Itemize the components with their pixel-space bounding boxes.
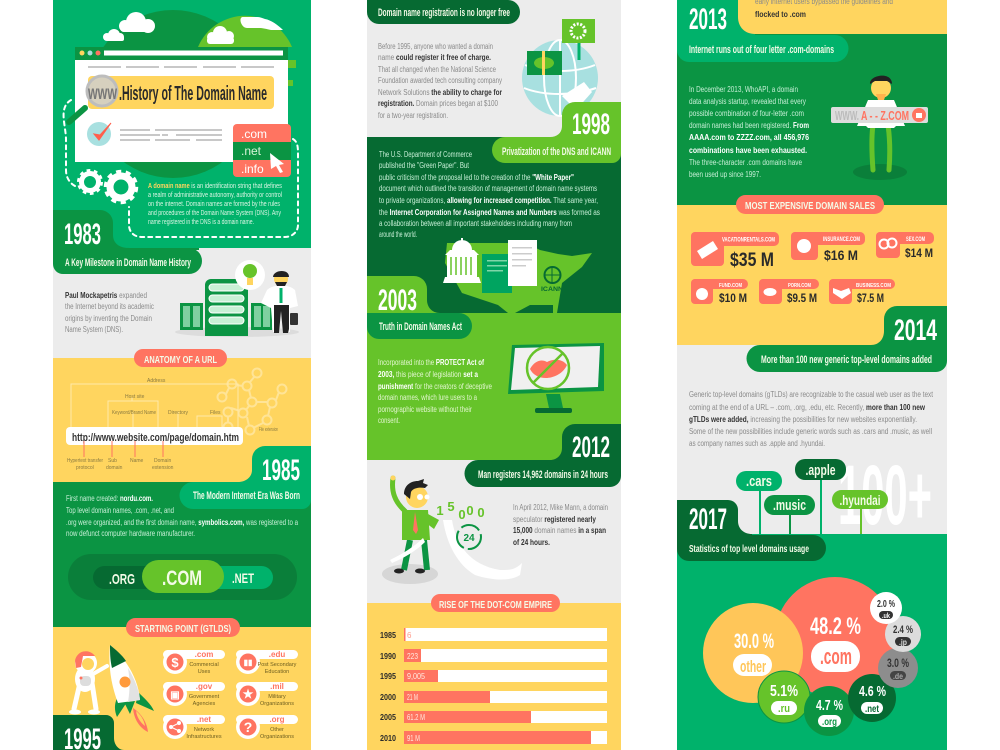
URL box bbox=[66, 427, 243, 457]
bubble: .ru bbox=[758, 671, 810, 723]
bubble: .uk bbox=[870, 592, 902, 624]
panel: 1985 milestone bbox=[53, 446, 311, 627]
domain extension menu: .com bbox=[241, 127, 267, 141]
pill heading bbox=[736, 195, 884, 214]
illustration: US map with capitol and documents bbox=[443, 238, 592, 313]
domain tags bbox=[736, 459, 888, 534]
sale: porn.com bbox=[759, 279, 819, 305]
milestone text: Top level domain names, .com, .net, and bbox=[66, 506, 174, 515]
column 2 bbox=[367, 0, 621, 750]
body text: Generic top-level domains (gTLDs) are recognizable to the casual web user as the text bbox=[689, 390, 934, 399]
bar chart bbox=[380, 628, 607, 744]
gTLD list: Other bbox=[270, 727, 284, 733]
bar chart: 1990 bbox=[380, 651, 396, 661]
gTLD list: Uses bbox=[198, 669, 211, 675]
bubble: .de bbox=[878, 648, 918, 688]
body text bbox=[689, 85, 809, 179]
URL labels: Keyword/Brand Name bbox=[112, 410, 156, 416]
illustration: man holding banner bbox=[831, 76, 928, 180]
URL labels: Sub bbox=[108, 458, 117, 464]
bar chart: 223 bbox=[407, 652, 418, 661]
sale: sex.com: SEX.COM bbox=[906, 237, 925, 243]
body text: In December 2013, WhoAPI, a domain bbox=[689, 85, 798, 94]
milestone text: Paul Mockapetris expanded bbox=[65, 291, 147, 300]
domain extension menu bbox=[233, 124, 291, 177]
panel: registration no longer free bbox=[367, 0, 621, 137]
body text: 2003, this piece of legislation set a bbox=[378, 370, 478, 379]
sale: business.com: BUSINESS.COM bbox=[856, 283, 891, 289]
panel: rise of the dot-com empire bbox=[367, 594, 621, 750]
body text: public criticism of the proposal led to the creation of the "White Paper" bbox=[379, 173, 574, 182]
body text: name could register it free of charge. bbox=[378, 53, 491, 62]
body text: 15,000 domain names in a span bbox=[513, 526, 606, 535]
body text: as company names such as .apple and .hyundai. bbox=[689, 439, 825, 448]
bubble: other bbox=[703, 603, 803, 703]
title: .History of The Domain Name bbox=[119, 83, 267, 105]
gTLD list: Military bbox=[268, 694, 286, 700]
body text: for a two-year registration. bbox=[378, 111, 448, 120]
body text: punishment for the creators of deceptive bbox=[378, 382, 492, 391]
panel: 2012 milestone bbox=[367, 424, 621, 603]
body text: Incorporated into the PROTECT Act of bbox=[378, 358, 484, 367]
gTLD list: Government bbox=[189, 694, 220, 700]
gTLD list: Education bbox=[265, 669, 289, 675]
graphic: TLD selector: .ORG bbox=[109, 571, 135, 588]
heading: Internet runs out of four letter .com-domains bbox=[689, 44, 834, 56]
body text: domain names, which lure users to a bbox=[378, 393, 477, 402]
bubble: .com bbox=[775, 577, 895, 697]
body text bbox=[513, 503, 608, 547]
sale: vacationrentals.com bbox=[691, 232, 779, 271]
URL labels: Domain bbox=[154, 458, 171, 464]
URL labels: Directory bbox=[168, 410, 189, 416]
body text bbox=[378, 42, 502, 120]
illustration: man with paper list bbox=[382, 476, 522, 584]
body text: been used up since 1997. bbox=[689, 170, 761, 179]
body text: coming at the end of a URL – .com, .org, .edu, etc. Recently, more than 100 new bbox=[689, 403, 926, 412]
URL labels: File extension bbox=[259, 427, 278, 433]
bubble: .de: 3.0 % bbox=[887, 656, 909, 670]
sale: sex.com bbox=[876, 232, 934, 260]
sale: insurance.com bbox=[791, 232, 865, 263]
body text: published the "Green Paper". But bbox=[379, 161, 470, 170]
definition text: and procedures of the Domain Name System (DNS). Any bbox=[148, 210, 281, 217]
gTLD list: ▮▮ bbox=[244, 658, 252, 667]
body text: the Internet Corporation for Assigned Names and Numbers was formed as bbox=[379, 208, 600, 217]
panel: 2017 statistics bbox=[677, 500, 947, 750]
bubble: .jp: .jp bbox=[899, 638, 907, 647]
body text: Foundation awarded tech consulting company bbox=[378, 76, 502, 85]
gTLD list: .edu bbox=[269, 650, 285, 659]
panel: 2014 milestone bbox=[677, 306, 947, 542]
sale: fund.com: $10 M bbox=[719, 291, 747, 305]
icon: magnifying glass bbox=[69, 76, 117, 122]
gTLD list: Infrastructures bbox=[186, 734, 222, 740]
gTLD list: $ bbox=[171, 655, 179, 670]
gTLD list: ★ bbox=[243, 687, 254, 701]
body text: registration. Domain prices began at $100 bbox=[378, 99, 498, 108]
bubble: .com: 48.2 % bbox=[810, 613, 861, 640]
bubble: .net: .net bbox=[865, 704, 880, 715]
illustration: man with paper list: 1 bbox=[436, 503, 444, 518]
illustration: man with paper list: 5 bbox=[447, 499, 455, 514]
definition text: a realm of administrative autonomy, authority or control bbox=[148, 192, 282, 199]
sale: business.com: $7.5 M bbox=[857, 291, 884, 305]
bubble: .net: 4.6 % bbox=[859, 683, 886, 700]
gTLD list: ? bbox=[244, 719, 252, 735]
sale: insurance.com: INSURANCE.COM bbox=[823, 237, 860, 243]
year 2013: 2013 bbox=[689, 3, 727, 36]
bar chart: 1985 bbox=[380, 630, 396, 640]
definition text: on the internet. Domain names are formed by the rules bbox=[148, 201, 280, 208]
gTLD list: ▣ bbox=[170, 690, 180, 701]
illustration: astronaut bbox=[69, 651, 107, 714]
illustration: man with paper list: 24 bbox=[463, 533, 475, 544]
bubble: .uk: .uk bbox=[882, 613, 890, 620]
gTLD list bbox=[163, 650, 298, 740]
body text: a collaboration between all important stakeholders including many from bbox=[379, 219, 572, 228]
illustration: globe and money bbox=[522, 19, 598, 116]
illustration: man holding banner: A - - Z.COM bbox=[861, 108, 909, 123]
bubble: .org: .org bbox=[822, 717, 837, 728]
domain tags: .hyundai bbox=[840, 492, 880, 508]
heading: Statistics of top level domains usage bbox=[689, 544, 809, 555]
bubble: other: 30.0 % bbox=[734, 630, 774, 653]
bar chart: 21 M bbox=[407, 693, 418, 702]
gTLD list: Agencies bbox=[193, 701, 216, 707]
milestone text: Name System (DNS). bbox=[65, 325, 123, 334]
body text: possible combination of four-letter .com bbox=[689, 109, 804, 118]
body text: combinations have been exhausted. bbox=[689, 146, 807, 155]
gTLD list: Organizations bbox=[260, 701, 294, 707]
domain extension menu: .net bbox=[241, 144, 262, 158]
year 1985: 1985 bbox=[262, 454, 300, 487]
bar chart: 2000 bbox=[380, 692, 396, 702]
bar chart: 91 M bbox=[407, 734, 420, 743]
bubble: .uk: 2.0 % bbox=[877, 599, 895, 610]
definition text: A domain name is an identification string that defines bbox=[148, 183, 282, 190]
bubble: .net bbox=[848, 674, 896, 722]
illustration: man with paper list: 0 bbox=[458, 507, 466, 522]
pill heading: MOST EXPENSIVE DOMAIN SALES bbox=[745, 200, 875, 212]
URL labels: domain bbox=[106, 465, 123, 471]
body text: data analysis startup, revealed that every bbox=[689, 97, 806, 106]
bar chart: 9,005 bbox=[407, 672, 425, 681]
bubble: .jp: 2.4 % bbox=[893, 624, 913, 636]
heading pill bbox=[367, 0, 520, 24]
pill heading: STARTING POINT (GTLDS) bbox=[135, 624, 231, 635]
decorative molecule network bbox=[218, 368, 286, 434]
heading pill bbox=[53, 248, 202, 274]
milestone text: First name created: nordu.com. bbox=[66, 494, 153, 503]
milestone text: origins by inventing the Domain bbox=[65, 314, 152, 323]
body text bbox=[379, 150, 600, 239]
dashed connector bbox=[64, 100, 298, 237]
body text: Network Solutions the ability to charge for bbox=[378, 88, 502, 97]
definition text: name registered in the DNS is a domain name. bbox=[148, 219, 254, 226]
illustration: DNS servers and man bbox=[175, 260, 299, 337]
year 1983: 1983 bbox=[64, 218, 101, 251]
bubble: .ru: .ru bbox=[778, 703, 790, 715]
illustration: rocket bbox=[109, 645, 154, 732]
illustration: monitor with crossed lips bbox=[508, 343, 604, 413]
bubble: .jp bbox=[885, 616, 921, 652]
URL labels: Host site bbox=[125, 394, 145, 400]
panel: 2013 milestone bbox=[677, 0, 947, 205]
bubble: .de: .de bbox=[893, 672, 903, 681]
body text: speculator registered nearly bbox=[513, 515, 596, 524]
body text: Some of the new possibilities include generic words such as .cars and .music, as well bbox=[689, 427, 932, 436]
URL labels: Name bbox=[130, 458, 144, 464]
graphic: TLD selector: .NET bbox=[232, 570, 254, 586]
panel: 2003 milestone bbox=[367, 276, 621, 460]
body text: The U.S. Department of Commerce bbox=[379, 150, 472, 159]
body text: pornographic website without their bbox=[378, 405, 472, 414]
sale: vacationrentals.com: VACATIONRENTALS.COM bbox=[722, 238, 775, 244]
pill heading bbox=[134, 349, 227, 367]
URL labels: Hypertext transfer bbox=[67, 458, 103, 464]
gTLD list: Commercial bbox=[189, 662, 219, 668]
definition text bbox=[148, 183, 282, 226]
year 1995 bbox=[53, 715, 124, 750]
sale: sex.com: $14 M bbox=[905, 246, 933, 260]
sale: vacationrentals.com: $35 M bbox=[730, 250, 774, 271]
bar chart: 6 bbox=[407, 631, 412, 640]
year 1998: 1998 bbox=[572, 108, 610, 141]
icon: globe with clouds bbox=[198, 16, 296, 86]
gTLD list: .gov bbox=[196, 682, 213, 691]
body text: domain names had been registered. From bbox=[689, 121, 809, 130]
heading pill: Domain name registration is no longer free bbox=[378, 7, 510, 19]
heading: Privatization of the DNS and ICANN bbox=[502, 146, 611, 158]
body text: consent. bbox=[378, 416, 400, 425]
sale: business.com bbox=[829, 279, 895, 305]
milestone text: the Internet beyond its academic bbox=[65, 302, 154, 311]
bubble: other: other bbox=[740, 657, 766, 676]
bar chart: 61.2 M bbox=[407, 713, 425, 722]
gTLD list: Organizations bbox=[260, 734, 294, 740]
bar chart: 2010 bbox=[380, 733, 396, 743]
domain tags: .cars bbox=[746, 473, 772, 490]
milestone text bbox=[65, 291, 154, 334]
body text: AAAA.com to ZZZZ.com, all 456,976 bbox=[689, 133, 809, 142]
pill heading: RISE OF THE DOT-COM EMPIRE bbox=[439, 600, 552, 611]
heading: The Modern Internet Era Was Born bbox=[193, 490, 300, 502]
body text: to private organizations, allowing for increased competition. That same year, bbox=[379, 196, 598, 205]
gTLD list: Post Secondary bbox=[258, 662, 297, 668]
year 2017: 2017 bbox=[689, 503, 727, 536]
gTLD list: .net bbox=[197, 715, 211, 724]
URL labels: protocol bbox=[76, 465, 94, 471]
sale: fund.com bbox=[691, 279, 748, 305]
year 2003: 2003 bbox=[378, 284, 417, 317]
illustration: man with paper list: 0 bbox=[477, 505, 485, 520]
illustration: man with paper list: 0 bbox=[466, 503, 474, 518]
illustration: man holding banner: WWW. bbox=[835, 108, 859, 123]
panel: 1998 milestone bbox=[367, 102, 621, 313]
icon: clouds bbox=[103, 12, 155, 41]
bar chart: 1995 bbox=[380, 671, 396, 681]
top text: flocked to .com bbox=[755, 10, 806, 19]
pill heading bbox=[431, 594, 560, 612]
panel: anatomy of a URL bbox=[53, 349, 311, 482]
body text: document which outlined the transition of management of domain name systems bbox=[379, 184, 597, 193]
panel: most expensive domain sales bbox=[677, 195, 947, 345]
URL labels: extension bbox=[152, 465, 174, 471]
bubble: .ru: 5.1% bbox=[770, 683, 798, 700]
gTLD list: .mil bbox=[270, 682, 284, 691]
body text: The three-character .com domains have bbox=[689, 158, 802, 167]
URL bracket diagram bbox=[71, 384, 238, 428]
domain tags: .apple bbox=[806, 462, 836, 479]
body text: gTLDs were added, increasing the possibilities for new websites exponentially. bbox=[689, 415, 917, 424]
bubble: .org: 4.7 % bbox=[816, 697, 843, 714]
pill heading: ANATOMY OF A URL bbox=[144, 355, 217, 366]
browser window bbox=[75, 47, 288, 162]
domain tags: .music bbox=[773, 497, 806, 514]
top text bbox=[755, 0, 893, 19]
icon: check mark bbox=[87, 122, 111, 146]
year 2012: 2012 bbox=[572, 431, 610, 464]
domain extension menu: .info bbox=[241, 162, 264, 176]
icon: magnifying glass: www bbox=[87, 83, 117, 104]
graphic: TLD selector: .COM bbox=[162, 567, 202, 590]
URL labels: Address bbox=[147, 378, 166, 384]
body text bbox=[378, 358, 492, 425]
body text: of 24 hours. bbox=[513, 538, 550, 547]
heading: Man registers 14,962 domains in 24 hours bbox=[478, 469, 608, 481]
sale: fund.com: FUND.COM bbox=[719, 283, 742, 289]
sale: insurance.com: $16 M bbox=[824, 247, 858, 263]
panel: starting point gTLDs bbox=[53, 618, 311, 750]
URL labels: Files bbox=[210, 410, 221, 416]
pill heading bbox=[126, 618, 240, 637]
body text: That all changed when the National Science bbox=[378, 65, 496, 74]
gTLD list: .com bbox=[195, 650, 213, 659]
heading: Truth in Domain Names Act bbox=[379, 321, 462, 333]
gTLD list: .org bbox=[269, 715, 285, 724]
milestone text bbox=[66, 494, 298, 538]
sale: porn.com: $9.5 M bbox=[787, 291, 817, 305]
bubble chart bbox=[703, 577, 921, 736]
body text bbox=[689, 390, 934, 448]
URL labels bbox=[67, 378, 278, 471]
URL box: http://www.website.com/page/domain.htm bbox=[72, 432, 239, 444]
column 3 bbox=[677, 0, 947, 750]
bar chart: 2005 bbox=[380, 712, 396, 722]
sale: porn.com: PORN.COM bbox=[788, 283, 811, 289]
body text: Before 1995, anyone who wanted a domain bbox=[378, 42, 493, 51]
milestone text: now defunct computer hardware manufacturer. bbox=[66, 529, 195, 538]
bubble: .com: .com bbox=[820, 644, 852, 669]
gTLD list: Network bbox=[194, 727, 214, 733]
body text: In April 2012, Mike Mann, a domain bbox=[513, 503, 608, 512]
milestone text: .org were organized, and the first domain name, symbolics.com, was registered to a bbox=[66, 518, 298, 527]
illustration: US map with capitol and documents: ICANN bbox=[541, 287, 563, 293]
year 2014: 2014 bbox=[894, 314, 937, 347]
heading pill: A Key Milestone in Domain Name History bbox=[65, 257, 192, 269]
column 1 bbox=[53, 0, 311, 750]
panel: intro header bbox=[53, 0, 311, 250]
icon: gears bbox=[79, 171, 136, 202]
bubble: .org bbox=[804, 686, 854, 736]
panel: 1983 milestone bbox=[53, 210, 311, 358]
graphic: TLD selector bbox=[68, 554, 297, 600]
body text: around the world. bbox=[379, 230, 417, 239]
